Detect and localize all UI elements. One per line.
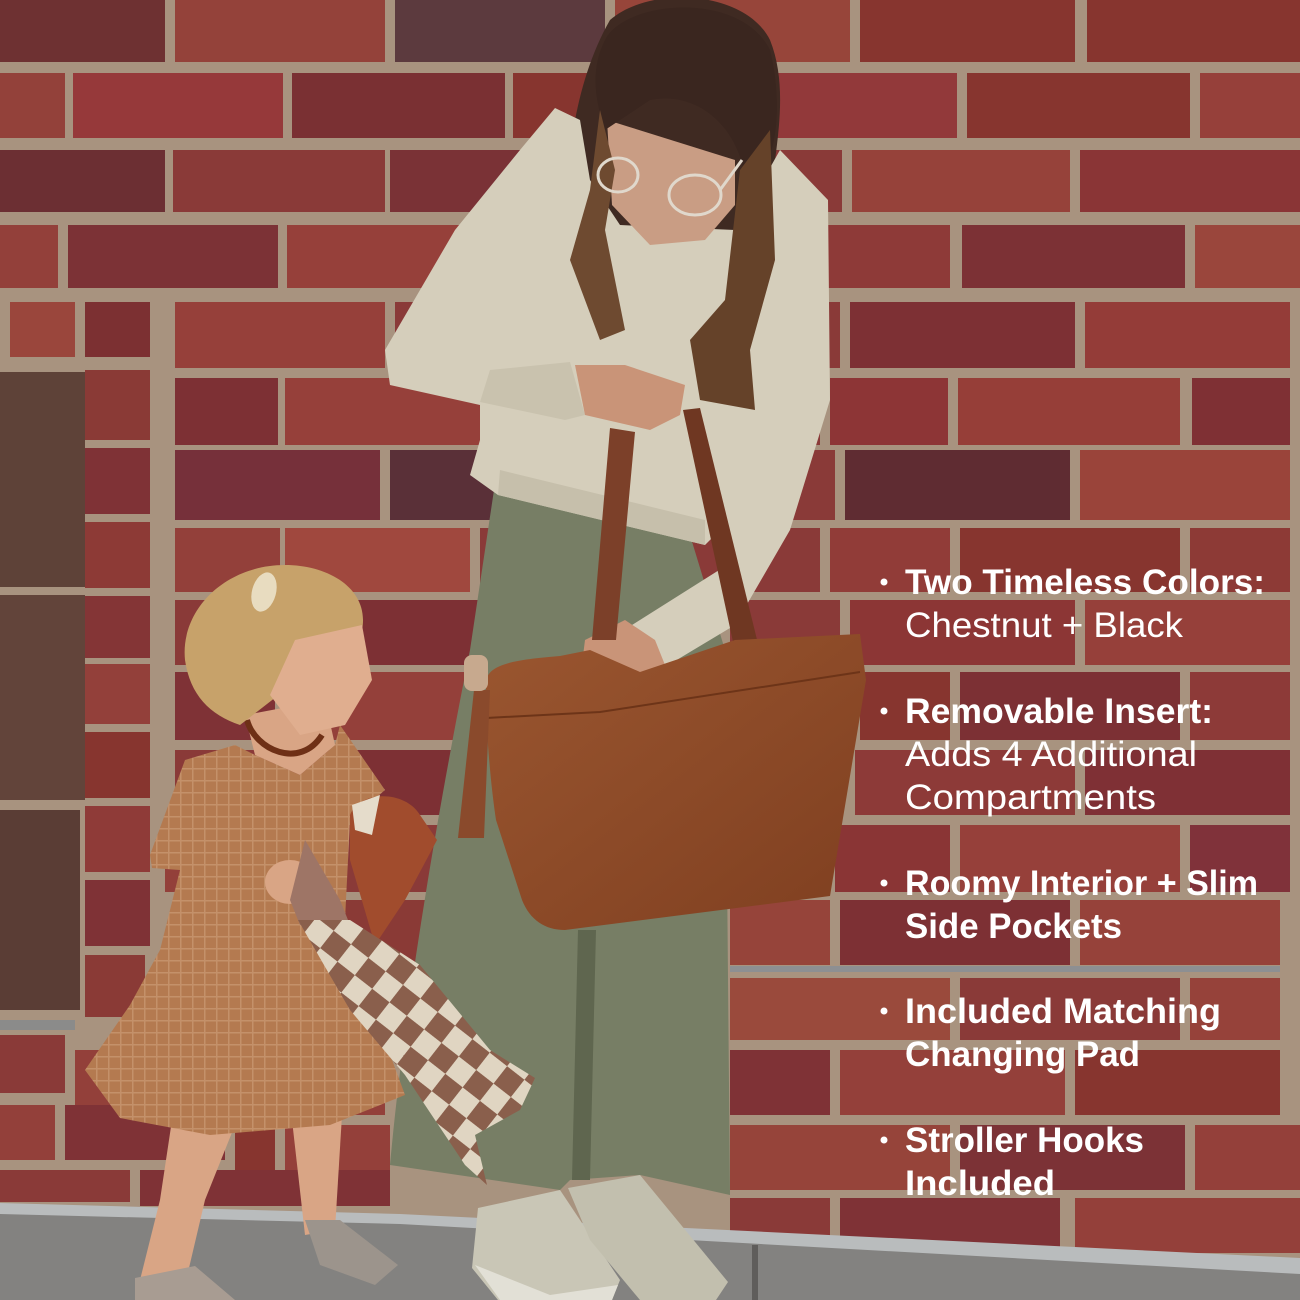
pocket seam [486,672,860,718]
item: roomy interior: Side Pockets [905,907,1122,946]
legs [140,1120,235,1285]
item: stroller hooks: Stroller Hooks [905,1121,1144,1160]
item: roomy interior: Roomy Interior + Slim [905,864,1258,903]
woman [385,0,830,1195]
amber necklace [247,720,322,754]
item: roomy interior [880,864,1258,946]
item: stroller hooks: Included [905,1164,1055,1203]
item: changing pad: Changing Pad [905,1035,1140,1074]
sidewalk [0,1203,1300,1300]
metal ledge [730,966,1280,972]
fox toy [350,796,437,945]
item: removable insert: Adds 4 Additional [905,735,1197,774]
pink cloth [290,840,350,925]
bag handles [592,428,635,640]
tote bag [458,408,866,930]
bag body [486,634,866,930]
item: removable insert: Removable Insert: [905,692,1213,731]
feature list [880,563,1265,1203]
glasses [598,158,742,215]
item: two timeless colors [880,563,1265,645]
item: changing pad: Included Matching [905,992,1221,1031]
item: removable insert [880,692,1213,817]
child [85,565,535,1300]
hair back [565,0,780,410]
sweater [385,108,830,670]
dress [85,725,405,1135]
sneakers [472,1175,728,1300]
item: stroller hooks [880,1121,1144,1203]
item: changing pad [880,992,1221,1074]
item: two timeless colors: Chestnut + Black [905,606,1184,645]
hair front [596,8,777,180]
hand on bag [580,620,665,695]
window recess panels [0,372,85,1030]
chest and neck [245,700,335,775]
hand on chest [575,365,685,430]
sandals [135,1266,235,1300]
face [607,120,735,245]
child hand [265,860,315,904]
curly hair [185,565,363,725]
item: two timeless colors: Two Timeless Colors: [905,563,1265,602]
wrist strap [458,690,490,838]
checkered blanket [298,920,535,1185]
hair clip [247,570,281,614]
face [270,625,372,735]
item: removable insert: Compartments [905,778,1156,817]
pants [390,470,730,1195]
